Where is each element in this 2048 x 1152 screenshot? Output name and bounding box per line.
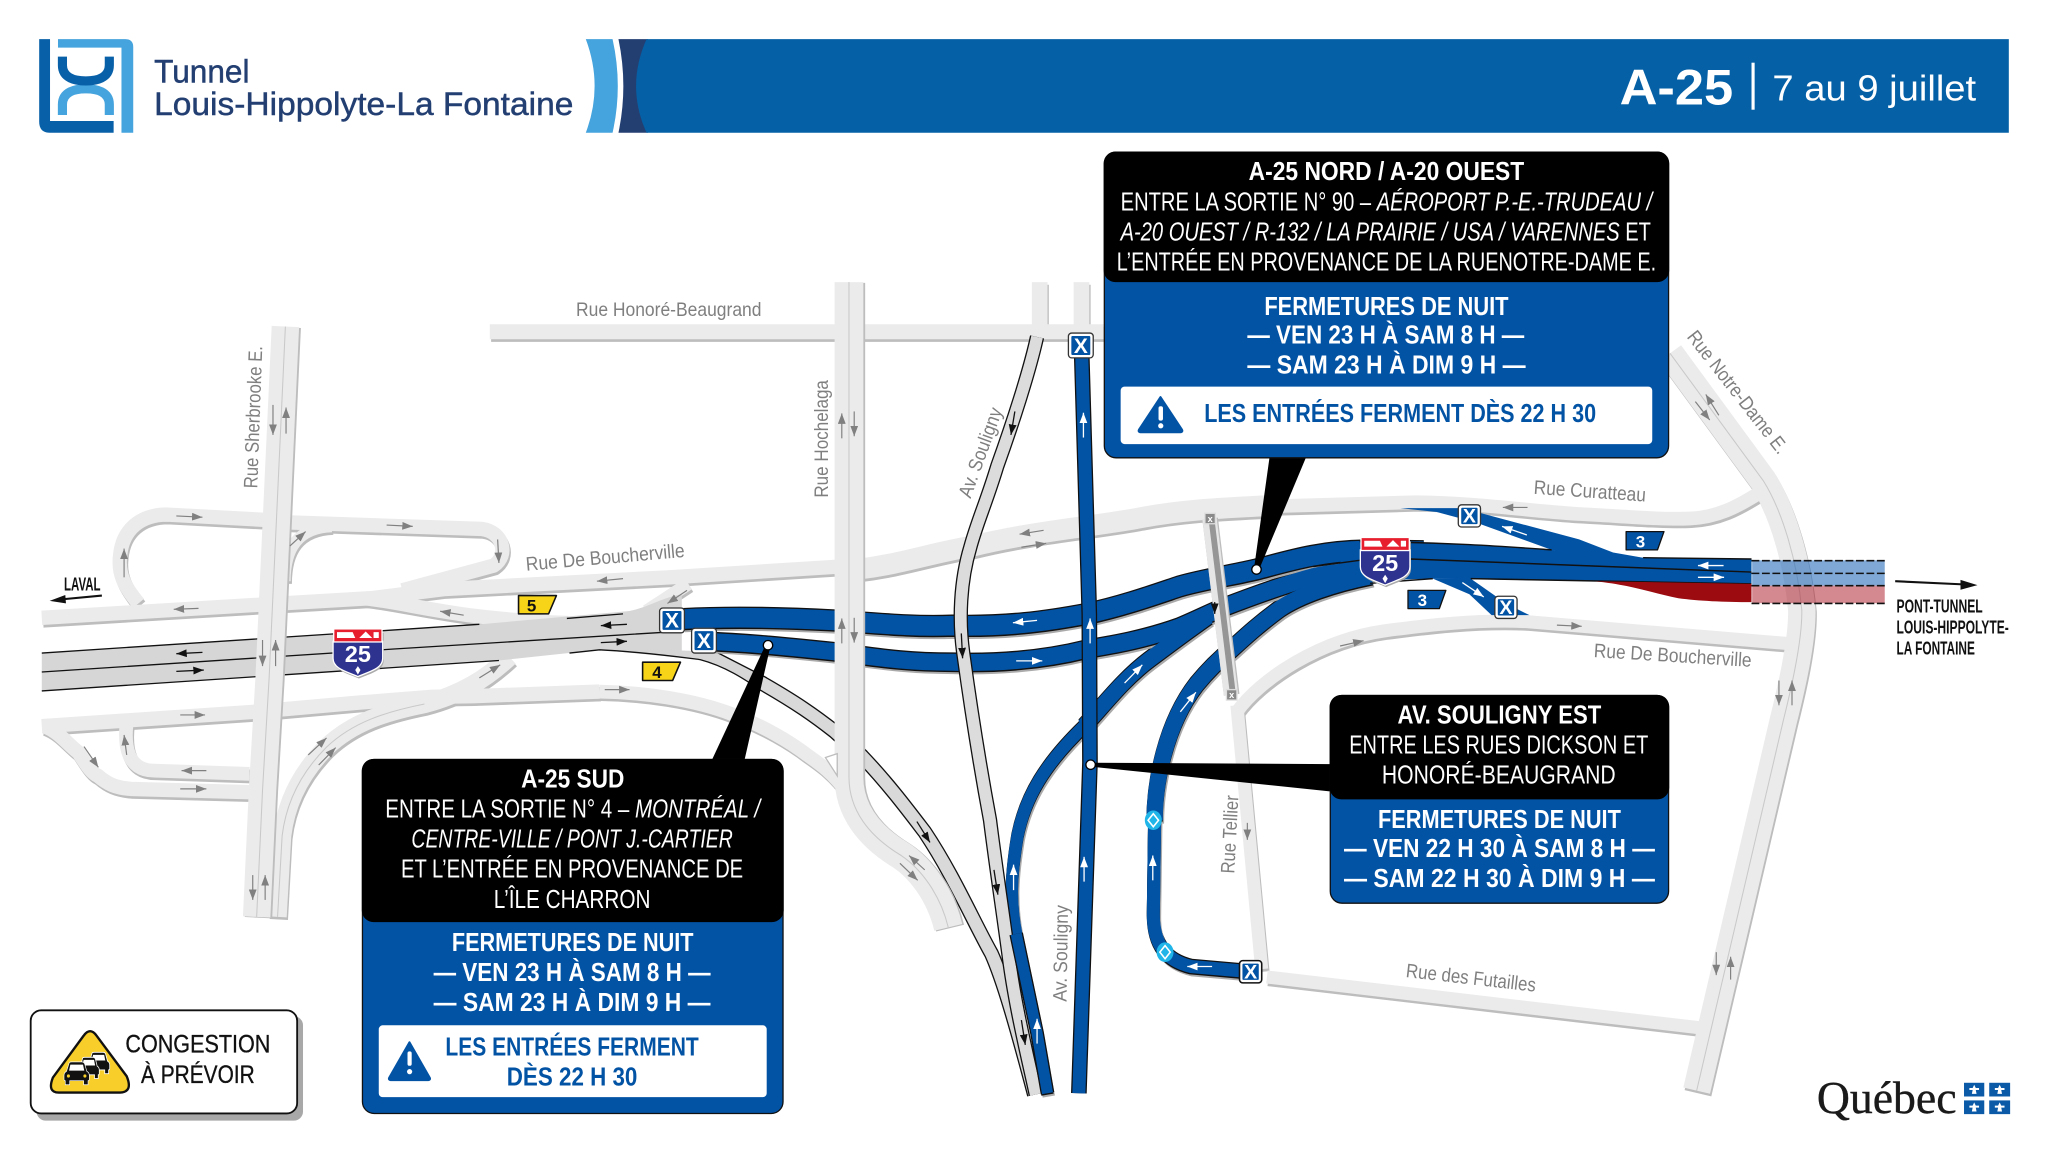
highway A-25 grey xyxy=(42,594,767,691)
schedule text xyxy=(1344,806,1655,893)
header xyxy=(39,39,2009,133)
direction pont-tunnel xyxy=(1895,580,2009,658)
exit sign 4: 4 xyxy=(652,663,662,682)
X marker: X xyxy=(1244,962,1257,984)
direction LAVAL xyxy=(50,573,102,603)
callout pointer xyxy=(712,645,771,760)
exit sign 3 north xyxy=(1626,532,1664,551)
label Rue Honoré-Beaugrand: Rue Honoré-Beaugrand xyxy=(576,299,761,321)
label Av. Souligny south: Av. Souligny xyxy=(1049,905,1073,1002)
schedule text: — SAM 23 H À DIM 9 H — xyxy=(1247,351,1526,380)
label Rue Notre-Dame E.: Rue Notre-Dame E. xyxy=(1682,327,1792,458)
schedule text: — VEN 23 H À SAM 8 H — xyxy=(434,958,711,987)
location text: HONORÉ-BEAUGRAND xyxy=(1382,761,1616,790)
black header panel xyxy=(1104,152,1669,282)
exit ramp 4 xyxy=(755,679,1034,1095)
location text: CENTRE-VILLE / PONT J.-CARTIER xyxy=(411,826,733,854)
legend text xyxy=(125,1032,270,1089)
crossing streets xyxy=(257,282,950,928)
label Rue De Boucherville east: Rue De Boucherville xyxy=(1593,640,1752,672)
legend shadow xyxy=(37,1016,303,1121)
location text: ENTRE LES RUES DICKSON ET xyxy=(1349,732,1648,760)
location text: A-20 OUEST / R-132 / LA PRAIRIE / USA / VARENNES ET xyxy=(1119,218,1651,246)
Av. Souligny grey xyxy=(961,337,1037,1095)
direction LAVAL: LAVAL xyxy=(64,573,101,594)
blue main A-25 east section xyxy=(1313,508,1752,615)
location text xyxy=(385,766,763,914)
icon: congestion triangle xyxy=(51,1031,129,1093)
blue panel xyxy=(362,760,783,1113)
location text: AV. SOULIGNY EST xyxy=(1398,702,1602,730)
X marker: X xyxy=(1499,597,1512,619)
direction pont-tunnel: LA FONTAINE xyxy=(1896,637,1975,658)
direction arrows grey xyxy=(84,394,1792,980)
schedule text: — SAM 22 H 30 À DIM 9 H — xyxy=(1344,864,1655,893)
exit sign 4 xyxy=(643,662,680,682)
warning box: LES ENTRÉES FERMENT DÈS 22 H 30 xyxy=(1204,398,1596,428)
exit sign 3 south xyxy=(1408,590,1446,610)
warning box: LES ENTRÉES FERMENT xyxy=(445,1031,699,1061)
logo tunnel xyxy=(39,39,133,133)
callout pointer xyxy=(1254,457,1306,569)
callout anchor dot xyxy=(763,641,773,650)
cyan diamond marker xyxy=(1145,810,1162,830)
shield A-25 west: 25 xyxy=(345,641,371,667)
exit sign 5 xyxy=(519,596,556,615)
label Av. Souligny north: Av. Souligny xyxy=(954,405,1007,501)
location text: ENTRE LA SORTIE N° 90 – AÉROPORT P.-E.-TRUDEAU / xyxy=(1121,187,1655,216)
flag xyxy=(1964,1083,2010,1114)
X marker xyxy=(1068,333,1093,358)
black header panel xyxy=(362,759,784,922)
overpass closed: x xyxy=(1208,514,1214,524)
callout anchor dot xyxy=(1252,565,1261,574)
location text: ET L’ENTRÉE EN PROVENANCE DE xyxy=(401,855,743,884)
X marker xyxy=(1495,596,1517,619)
callout: A-25 Sud xyxy=(362,641,784,1113)
warning box xyxy=(379,1025,767,1097)
legend text: CONGESTION xyxy=(125,1032,270,1059)
title xyxy=(1620,59,1976,115)
tunnel translucent section xyxy=(1752,560,1885,603)
location text: ENTRE LA SORTIE N° 4 – MONTRÉAL / xyxy=(385,795,763,824)
logo Québec: Québec xyxy=(1817,1072,1957,1123)
location text: L’ÎLE CHARRON xyxy=(494,885,650,914)
direction pont-tunnel: PONT-TUNNEL xyxy=(1896,596,1983,617)
schedule text: FERMETURES DE NUIT xyxy=(452,929,694,957)
X marker xyxy=(692,628,716,653)
title: A-25 xyxy=(1620,59,1733,115)
label Rue Curatteau: Rue Curatteau xyxy=(1533,477,1647,507)
road map xyxy=(42,282,1885,1097)
warning box: DÈS 22 H 30 xyxy=(507,1061,637,1091)
shield A-25 east: 25 xyxy=(1372,550,1398,576)
location text xyxy=(1349,702,1648,790)
location text: A-25 SUD xyxy=(521,766,624,794)
X marker xyxy=(660,608,684,633)
black header panel xyxy=(1330,695,1669,799)
surface streets xyxy=(42,282,1803,1093)
blue closed ramps xyxy=(683,549,1425,1097)
schedule text: — VEN 23 H À SAM 8 H — xyxy=(1247,321,1525,350)
X marker: X xyxy=(697,630,711,653)
schedule text: — VEN 22 H 30 À SAM 8 H — xyxy=(1344,834,1655,863)
legend text: À PRÉVOIR xyxy=(141,1062,255,1089)
label Rue Tellier: Rue Tellier xyxy=(1217,794,1243,874)
blue panel xyxy=(1330,696,1669,903)
schedule text: FERMETURES DE NUIT xyxy=(1378,806,1621,834)
warning box xyxy=(1121,387,1652,444)
callout: A-25 Nord xyxy=(1104,152,1669,574)
exit sign 3 south: 3 xyxy=(1418,591,1427,610)
blue lane over Souligny junction xyxy=(1016,934,1048,1093)
overpass closed: x xyxy=(1229,690,1235,700)
logo text xyxy=(154,53,573,122)
exit sign 3 north: 3 xyxy=(1636,532,1645,551)
direction arrows white xyxy=(1013,413,1724,1044)
legend: congestion xyxy=(31,1010,303,1121)
label Rue Sherbrooke E.: Rue Sherbrooke E. xyxy=(240,346,267,489)
X marker xyxy=(1240,961,1262,984)
schedule text xyxy=(1247,293,1526,380)
callout: Av. Souligny Est xyxy=(1086,695,1669,903)
X marker: X xyxy=(1074,335,1088,358)
logo text: Louis-Hippolyte-La Fontaine xyxy=(154,86,573,122)
label Rue Hochelaga: Rue Hochelaga xyxy=(811,380,833,498)
logo text: Tunnel xyxy=(154,53,249,89)
title: 7 au 9 juillet xyxy=(1772,68,1976,109)
location text xyxy=(1117,158,1656,276)
location text: L’ENTRÉE EN PROVENANCE DE LA RUENOTRE-DAME E. xyxy=(1117,247,1656,276)
label Rue des Futailles: Rue des Futailles xyxy=(1405,960,1537,997)
X marker xyxy=(1458,505,1480,528)
closure X markers xyxy=(660,333,1517,984)
location text: A-25 NORD / A-20 OUEST xyxy=(1249,158,1525,186)
X marker: X xyxy=(1463,506,1476,528)
label Rue De Boucherville west: Rue De Boucherville xyxy=(525,540,686,576)
header bar xyxy=(586,39,2009,133)
overpass closed xyxy=(1205,513,1237,700)
shield A-25 west xyxy=(333,629,384,679)
callout anchor dot xyxy=(1086,760,1095,769)
shield A-25 east xyxy=(1360,537,1411,587)
legend box xyxy=(31,1010,297,1113)
exit sign 5: 5 xyxy=(527,596,536,615)
schedule text: — SAM 23 H À DIM 9 H — xyxy=(434,988,711,1017)
X marker: X xyxy=(665,610,679,633)
direction arrows black xyxy=(176,411,1215,1045)
schedule text: FERMETURES DE NUIT xyxy=(1264,293,1509,321)
street labels xyxy=(240,299,1792,1002)
cyan diamond marker xyxy=(1157,942,1174,962)
callout pointer xyxy=(1092,763,1331,792)
schedule text xyxy=(434,929,711,1017)
blue panel xyxy=(1104,152,1669,458)
Av. Souligny blue vertical xyxy=(1079,346,1090,1093)
